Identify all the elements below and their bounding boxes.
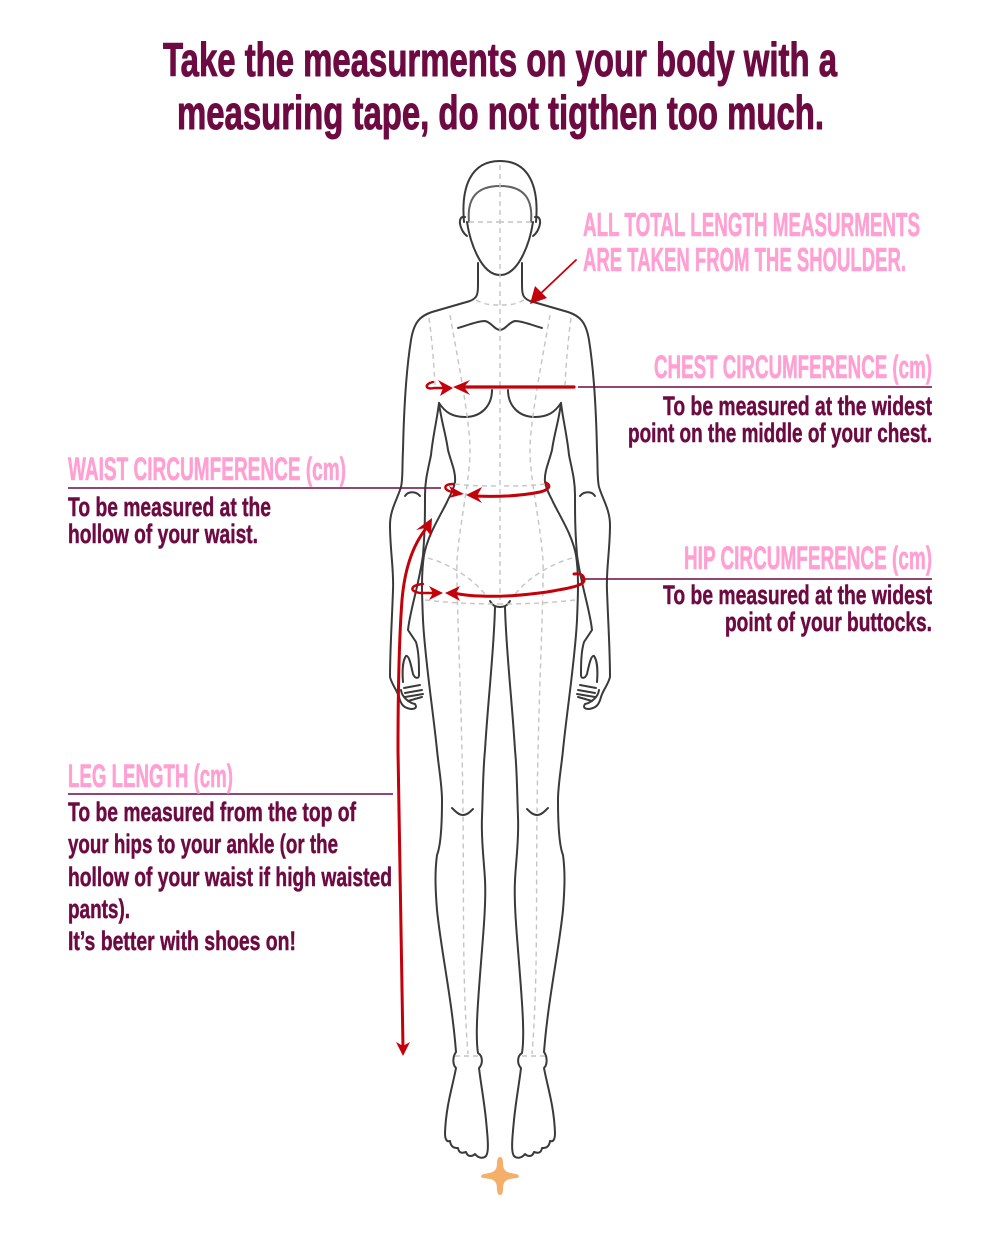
- left half of body: [390, 222, 500, 1158]
- label: waist circumference: hollow of your waist.: [68, 519, 258, 549]
- label: leg length: It’s better with shoes on!: [68, 926, 296, 956]
- label: hip circumference: [663, 540, 932, 637]
- icon: orange sparkle: [481, 1157, 519, 1195]
- label: leg length: LEG LENGTH (cm): [68, 758, 233, 794]
- label: waist circumference: [68, 451, 346, 549]
- shoulder reference arrow: [530, 260, 576, 304]
- label: leg length: hollow of your waist if high waisted: [68, 862, 392, 892]
- center line: [499, 165, 501, 600]
- label: waist circumference: To be measured at the: [68, 492, 271, 522]
- note: shoulder: [583, 206, 920, 278]
- right half of body: [500, 222, 610, 1158]
- label: leg length: [68, 758, 393, 956]
- leg length arrow: [396, 518, 432, 1056]
- label: chest circumference: [628, 349, 932, 448]
- body figure illustration: [390, 161, 610, 1158]
- label: leg length: pants).: [68, 894, 130, 924]
- title: [163, 33, 838, 139]
- chest arrows: [427, 380, 932, 396]
- label: waist circumference: WAIST CIRCUMFERENCE (cm): [68, 451, 346, 487]
- hip arrows: [412, 574, 932, 601]
- label: leg length: To be measured from the top of: [68, 797, 357, 827]
- waist arrows: [68, 483, 549, 503]
- label: leg length: your hips to your ankle (or the: [68, 829, 338, 859]
- head and hair: [460, 161, 540, 275]
